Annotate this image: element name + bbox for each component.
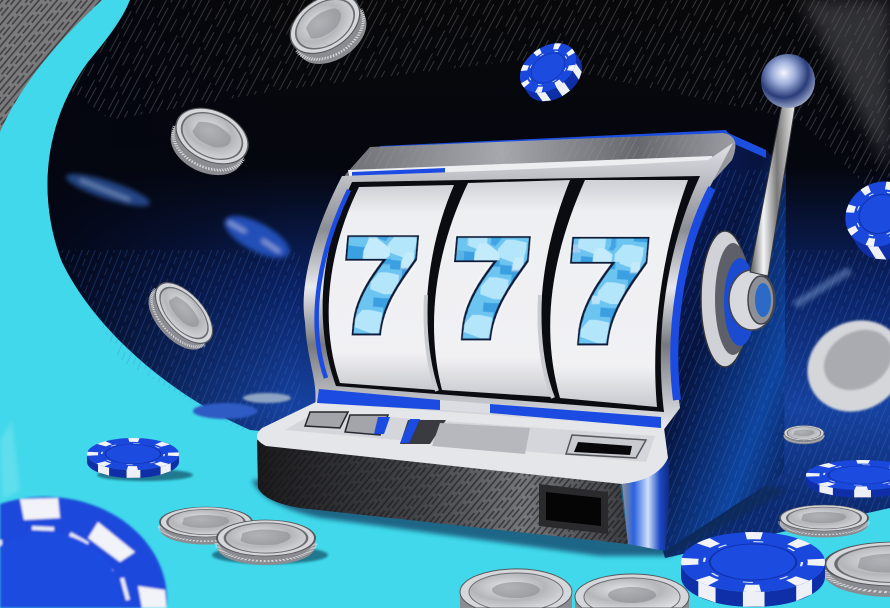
blurred chip: upper left: [63, 168, 153, 212]
machine chrome frame: [304, 143, 733, 432]
reel chrome dividers: [425, 295, 553, 398]
background: grey glow top right: [800, 0, 890, 170]
chip: floor left: [87, 438, 179, 478]
frame blue: right outer: [674, 188, 712, 400]
hatched panel: [432, 423, 530, 454]
frame blue: left inner: [317, 190, 349, 378]
payout slot: [566, 435, 646, 458]
coin: far lower right: [825, 542, 890, 597]
chip: right stack: [806, 460, 890, 498]
console blue strip left: [317, 389, 440, 410]
coin: bottom center: [460, 569, 572, 608]
slot machine: [257, 54, 815, 551]
blurred chip: middle left: [219, 208, 295, 266]
seven 3: 7: [560, 212, 653, 371]
seven 1: 7: [336, 212, 421, 358]
coin shadow left: [212, 546, 328, 564]
blurred chips: behind the machine: [193, 393, 291, 419]
chip: bottom right large: [681, 532, 825, 607]
lever arm: [750, 104, 795, 276]
machine top housing: [345, 133, 735, 186]
coin: upper left: [162, 97, 257, 186]
coin slot: [400, 419, 446, 444]
background: blue hatching: [60, 250, 890, 556]
reel 3: [550, 180, 688, 407]
machine console: [257, 402, 668, 484]
coin: floor left front: [217, 520, 315, 565]
cyan streak marks: [0, 420, 20, 500]
base chrome corner: [622, 458, 669, 551]
coin: behind right: [784, 426, 824, 444]
machine floor shadow: [252, 470, 790, 556]
machine base: [257, 440, 628, 544]
console blue strip right: [490, 404, 661, 428]
chip: top: [511, 33, 591, 112]
seven 2: 7: [445, 212, 534, 364]
console buttons: [305, 412, 390, 435]
console inner panel: [285, 412, 655, 462]
side dial: [701, 231, 775, 367]
window dark interior: [323, 176, 700, 412]
blurred coin: right edge: [791, 303, 890, 429]
chip shadow left: [97, 469, 193, 481]
coin: bottom center right: [575, 574, 689, 608]
console chrome strip: [440, 400, 490, 413]
background: grey hatching: [70, 0, 890, 210]
coin: middle left: [138, 273, 223, 360]
coin: lower right: [780, 505, 868, 538]
chip: bottom left large: [0, 497, 167, 608]
blurred streak: right: [795, 270, 850, 305]
tray opening: [539, 484, 608, 534]
machine top bar: [348, 156, 715, 180]
machine side panel: [640, 132, 786, 551]
background: top-left sketch corner: [0, 0, 102, 132]
coin: floor left back: [160, 507, 252, 544]
machine top blue strip: [352, 168, 445, 180]
lever ball: [761, 54, 815, 108]
chip: right edge: [833, 169, 890, 273]
reel 1: [329, 185, 454, 390]
coin: top: [280, 0, 377, 76]
reel 2: [434, 180, 570, 397]
